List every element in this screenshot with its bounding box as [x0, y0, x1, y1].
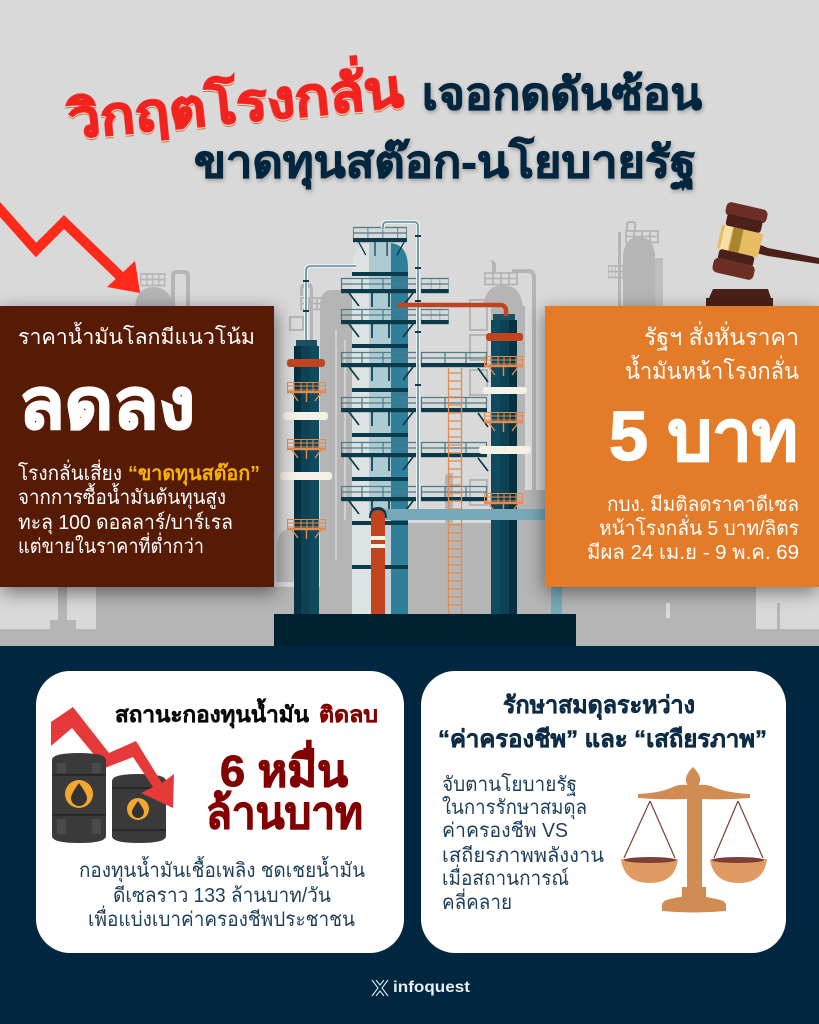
panel heading: น้ำมันหน้าโรงกลั่น: [625, 355, 799, 384]
panel: government ex-refinery price cut: [545, 306, 819, 587]
navy footer band: [0, 646, 819, 1024]
card body text: คลี่คลาย: [442, 888, 512, 914]
icon: small oil barrel: [112, 774, 166, 843]
panel body text: “ขาดทุนสต๊อก”: [128, 463, 260, 486]
card body text: เสถียรภาพพลังงาน: [442, 845, 604, 867]
panel body text: กบง. มีมติลดราคาดีเซล: [607, 494, 799, 516]
pipes: [369, 222, 562, 614]
big number: 60 billion baht: [206, 740, 363, 838]
central tower: [352, 243, 408, 614]
icon: red falling arrow: [51, 707, 174, 808]
icon: gavel: [706, 201, 819, 306]
title: [64, 52, 702, 190]
refinery illustration: [274, 222, 576, 646]
icon: large oil barrel: [52, 753, 106, 843]
panel body text: จากการซื้อน้ำมันต้นทุนสูง: [18, 483, 226, 510]
panel: world oil price falling: [0, 306, 274, 587]
panel body text: [18, 459, 260, 558]
panel body text: มีผล 24 เม.ย - 9 พ.ค. 69: [587, 542, 799, 564]
right column: [479, 314, 531, 614]
big number: 5 baht: 5 บาท: [609, 397, 798, 475]
panel body text: แต่ขายในราคาที่ต่ำกว่า: [18, 532, 204, 558]
card body text: [442, 773, 604, 914]
card heading: ติดลบ: [319, 702, 378, 727]
logo: infoquest: infoquest: [393, 979, 471, 996]
card body text: จับตานโยบายรัฐ: [442, 773, 577, 796]
card: oil fund status: [36, 671, 404, 953]
left column: [280, 266, 356, 614]
big number: 60 billion baht: ล้านบาท: [206, 789, 363, 838]
card heading: [115, 698, 378, 729]
card body text: ดีเซลราว 133 ล้านบาท/วัน: [113, 885, 331, 907]
card body text: ค่าครองชีพ VS: [442, 820, 568, 842]
panel body text: หน้าโรงกลั่น 5 บาท/ลิตร: [599, 514, 799, 540]
card body text: เพื่อแบ่งเบาค่าครองชีพประชาชน: [88, 905, 355, 931]
orange ladder: [448, 368, 462, 614]
card body text: เมื่อสถานการณ์: [442, 864, 569, 890]
panel body text: ทะลุ 100 ดอลลาร์/บาร์เรล: [18, 511, 233, 535]
background silhouette refinery: [0, 221, 819, 646]
card body text: กองทุนน้ำมันเชื้อเพลิง ชดเชยน้ำมัน: [79, 856, 365, 883]
card body text: ในการรักษาสมดุล: [442, 796, 587, 820]
icon: falling price arrow: [0, 205, 140, 293]
panel body text: [587, 494, 799, 564]
card heading: [438, 692, 767, 753]
panel heading: รัฐฯ สั่งหั่นราคา: [644, 321, 799, 351]
card body text: [79, 856, 365, 931]
base platform: [274, 614, 576, 646]
icon: balance scales: [621, 767, 767, 912]
panel heading: ราคาน้ำมันโลกมีแนวโน้ม: [18, 322, 255, 349]
panel heading: [625, 321, 799, 384]
card heading: สถานะกองทุนน้ำมัน: [115, 698, 309, 729]
title: line two: ขาดทุนสต๊อก-นโยบายรัฐ: [194, 135, 696, 190]
title: red tilted headline: วิกฤตโรงกลั่น: [64, 52, 406, 150]
platforms and railings: [341, 227, 488, 515]
card heading: “ค่าครองชีพ” และ “เสถียรภาพ”: [438, 726, 767, 753]
background: [0, 0, 819, 646]
card: balance cost of living and stability: [421, 671, 786, 953]
title: line one: เจอกดดันซ้อน: [422, 70, 702, 119]
big number: 60 billion baht: 6 หมื่น: [220, 740, 348, 796]
panel body text: โรงกลั่นเสี่ยง: [18, 459, 122, 485]
card heading: รักษาสมดุลระหว่าง: [503, 692, 695, 721]
big word: falling: ลดลง: [19, 365, 195, 443]
